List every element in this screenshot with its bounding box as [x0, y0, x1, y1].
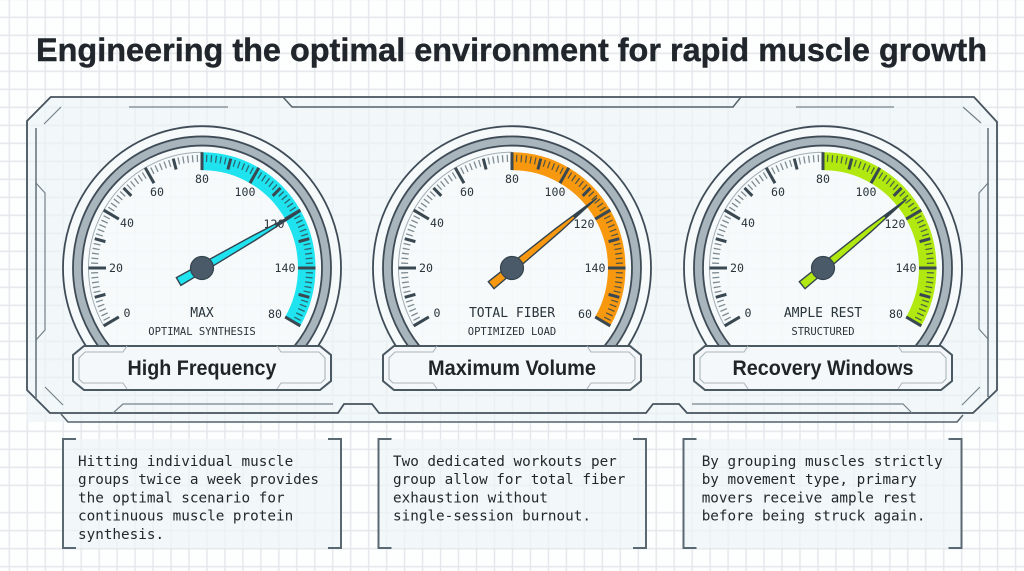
text box: recovery windows: movers receive ample rest [702, 490, 917, 506]
scale numbers: 40 [430, 216, 444, 230]
scale numbers: 40 [120, 216, 134, 230]
text box: recovery windows: By grouping muscles strictly [702, 454, 943, 470]
text box: high frequency: synthesis. [78, 527, 164, 543]
readout text: TOTAL FIBER [469, 306, 555, 321]
text box: high frequency: Hitting individual muscle [78, 454, 293, 470]
gauge: recovery windows [684, 126, 962, 410]
text box: recovery windows [684, 439, 962, 548]
scale numbers: 60 [150, 185, 164, 199]
scale numbers: 120 [574, 217, 594, 231]
scale numbers: 20 [419, 261, 433, 275]
scale numbers: 0 [124, 306, 131, 320]
text box: high frequency: the optimal scenario for [78, 490, 285, 506]
scale numbers: 60 [771, 185, 785, 199]
panel: dashboard frame [27, 97, 997, 422]
text box: high frequency [63, 439, 341, 548]
needle [799, 196, 909, 289]
scale numbers: 80 [195, 172, 209, 186]
scale numbers: 80 [816, 172, 830, 186]
scale numbers: 0 [434, 306, 441, 320]
scale numbers: 40 [741, 216, 755, 230]
gauge: maximum volume [373, 126, 651, 410]
text box: maximum volume: single-session burnout. [393, 509, 591, 525]
readout text [148, 306, 256, 338]
gauge: high frequency [63, 126, 341, 410]
gauge rim [62, 125, 342, 345]
needle [488, 195, 600, 289]
colored zone arc [202, 161, 307, 321]
scale numbers: 80 [505, 172, 519, 186]
scale numbers [419, 172, 605, 321]
needle hub [190, 256, 214, 280]
scale numbers: 100 [545, 185, 565, 199]
scale numbers: 20 [109, 261, 123, 275]
gauge rim [372, 125, 652, 345]
colored zone arc [512, 161, 617, 321]
text box: maximum volume: exhaustion without [393, 490, 548, 506]
scale numbers: 120 [885, 217, 905, 231]
readout text [784, 306, 862, 338]
needle [176, 207, 303, 285]
readout text: OPTIMIZED LOAD [468, 326, 556, 338]
gauge label: High Frequency [128, 357, 277, 380]
scale numbers: 120 [264, 217, 284, 231]
title: Engineering the optimal environment for rapid muscle growth [36, 32, 987, 68]
text box: high frequency: groups twice a week provides [78, 472, 319, 488]
scale numbers: 140 [896, 261, 916, 275]
text box: maximum volume [378, 439, 646, 548]
readout text: OPTIMAL SYNTHESIS [148, 326, 256, 338]
scale numbers: 60 [460, 185, 474, 199]
readout text [468, 306, 556, 338]
gauge label: Maximum Volume [428, 357, 596, 380]
scale numbers: 140 [275, 261, 295, 275]
readout text: STRUCTURED [791, 326, 855, 338]
needle hub [812, 256, 834, 280]
label plate [73, 346, 331, 390]
gauge label: Recovery Windows [732, 357, 914, 380]
scale numbers: 100 [856, 185, 876, 199]
scale numbers [109, 172, 295, 321]
text box: maximum volume: Two dedicated workouts per [393, 454, 617, 470]
readout text: MAX [190, 306, 214, 321]
scale numbers: 80 [889, 307, 903, 321]
needle hub [500, 256, 524, 280]
label plate [694, 346, 952, 390]
colored zone arc [823, 161, 928, 321]
label plate [383, 346, 641, 390]
readout text: AMPLE REST [784, 306, 862, 321]
scale numbers [730, 172, 916, 321]
text box: maximum volume: group allow for total fiber [393, 472, 626, 488]
text box: high frequency: continuous muscle protein [78, 509, 293, 525]
scale numbers: 140 [585, 261, 605, 275]
tick marks [709, 152, 936, 326]
tick marks [88, 152, 315, 326]
gauge rim [683, 125, 963, 345]
text box: recovery windows: by movement type, primary [702, 472, 917, 488]
text box: recovery windows: before being struck again. [702, 509, 925, 525]
tick marks [398, 152, 626, 326]
scale numbers: 0 [745, 306, 752, 320]
scale numbers: 20 [730, 261, 744, 275]
scale numbers: 60 [578, 307, 592, 321]
scale numbers: 80 [268, 307, 282, 321]
scale numbers: 100 [235, 185, 255, 199]
